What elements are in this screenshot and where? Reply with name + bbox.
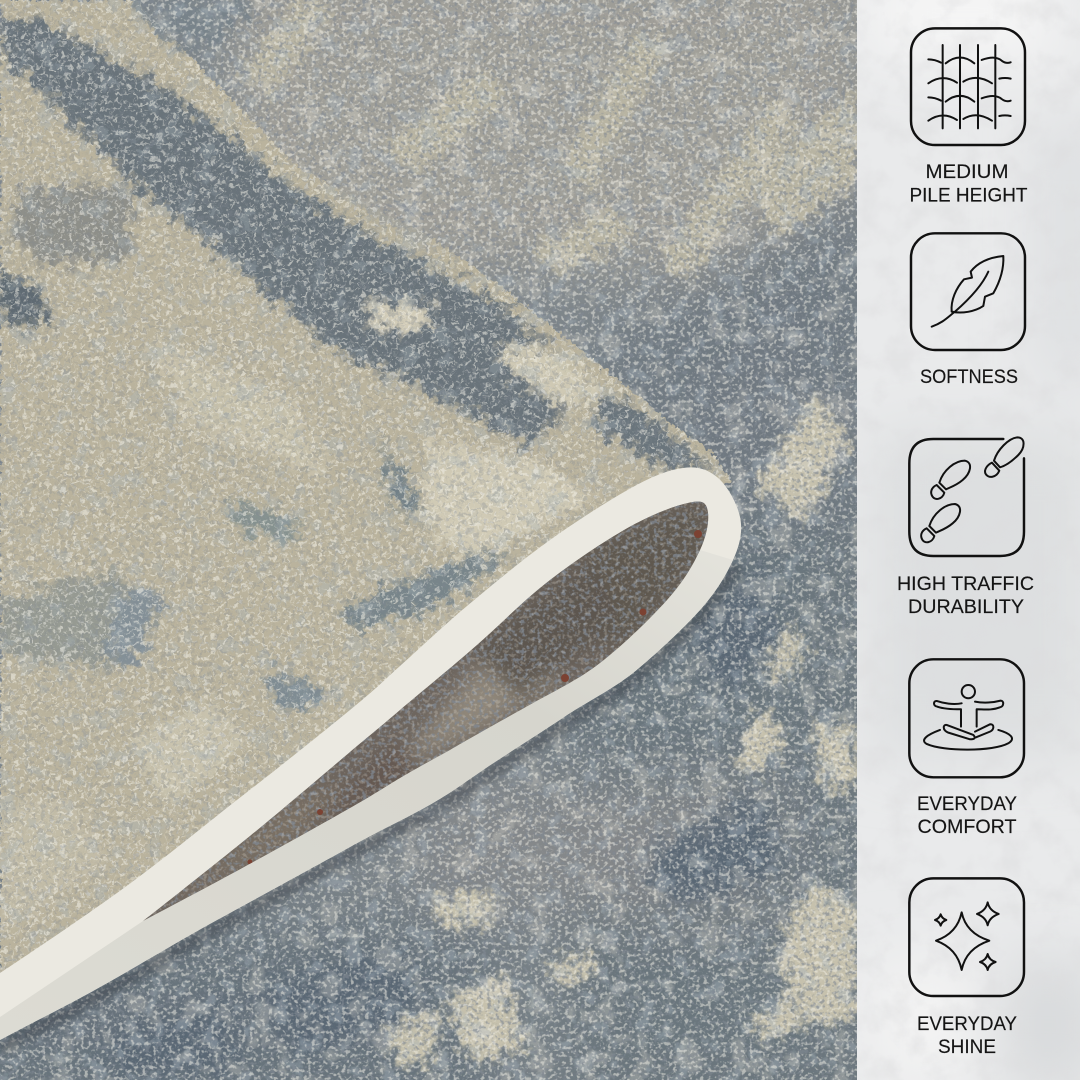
label: high traffic durability: DURABILITY — [908, 597, 1024, 618]
label: everyday shine: EVERYDAY — [917, 1014, 1017, 1035]
dark diagonal stripe — [0, 17, 600, 445]
white rug binding edge: lower band — [0, 550, 733, 1040]
label: high traffic durability: HIGH TRAFFIC — [897, 574, 1034, 595]
feature: high traffic durability — [897, 437, 1034, 618]
label: medium pile height: PILE HEIGHT — [910, 186, 1028, 206]
feature: everyday comfort — [909, 659, 1024, 838]
feature: medium pile height — [910, 28, 1028, 207]
icon: footprints — [909, 437, 1024, 556]
label: medium pile height: MEDIUM — [926, 162, 1008, 183]
white rug binding edge: upper band — [0, 467, 741, 1040]
folded rug flap, beige top face — [0, 0, 740, 1000]
label: softness: SOFTNESS — [920, 367, 1018, 388]
icon: feather — [911, 233, 1025, 350]
binding shadow — [0, 565, 738, 1048]
icon: meditating person — [909, 659, 1024, 777]
rug underside — [140, 490, 720, 930]
panel: feature column — [857, 0, 1080, 1080]
beige patch upper right — [755, 395, 850, 520]
icon: pile grid — [911, 28, 1025, 145]
feature: everyday shine — [909, 878, 1024, 1058]
label: everyday shine: SHINE — [938, 1037, 996, 1058]
icon: sparkles — [909, 878, 1024, 996]
label: everyday comfort: EVERYDAY — [917, 794, 1017, 815]
label: everyday comfort: COMFORT — [918, 817, 1017, 838]
feature: softness — [911, 233, 1025, 388]
